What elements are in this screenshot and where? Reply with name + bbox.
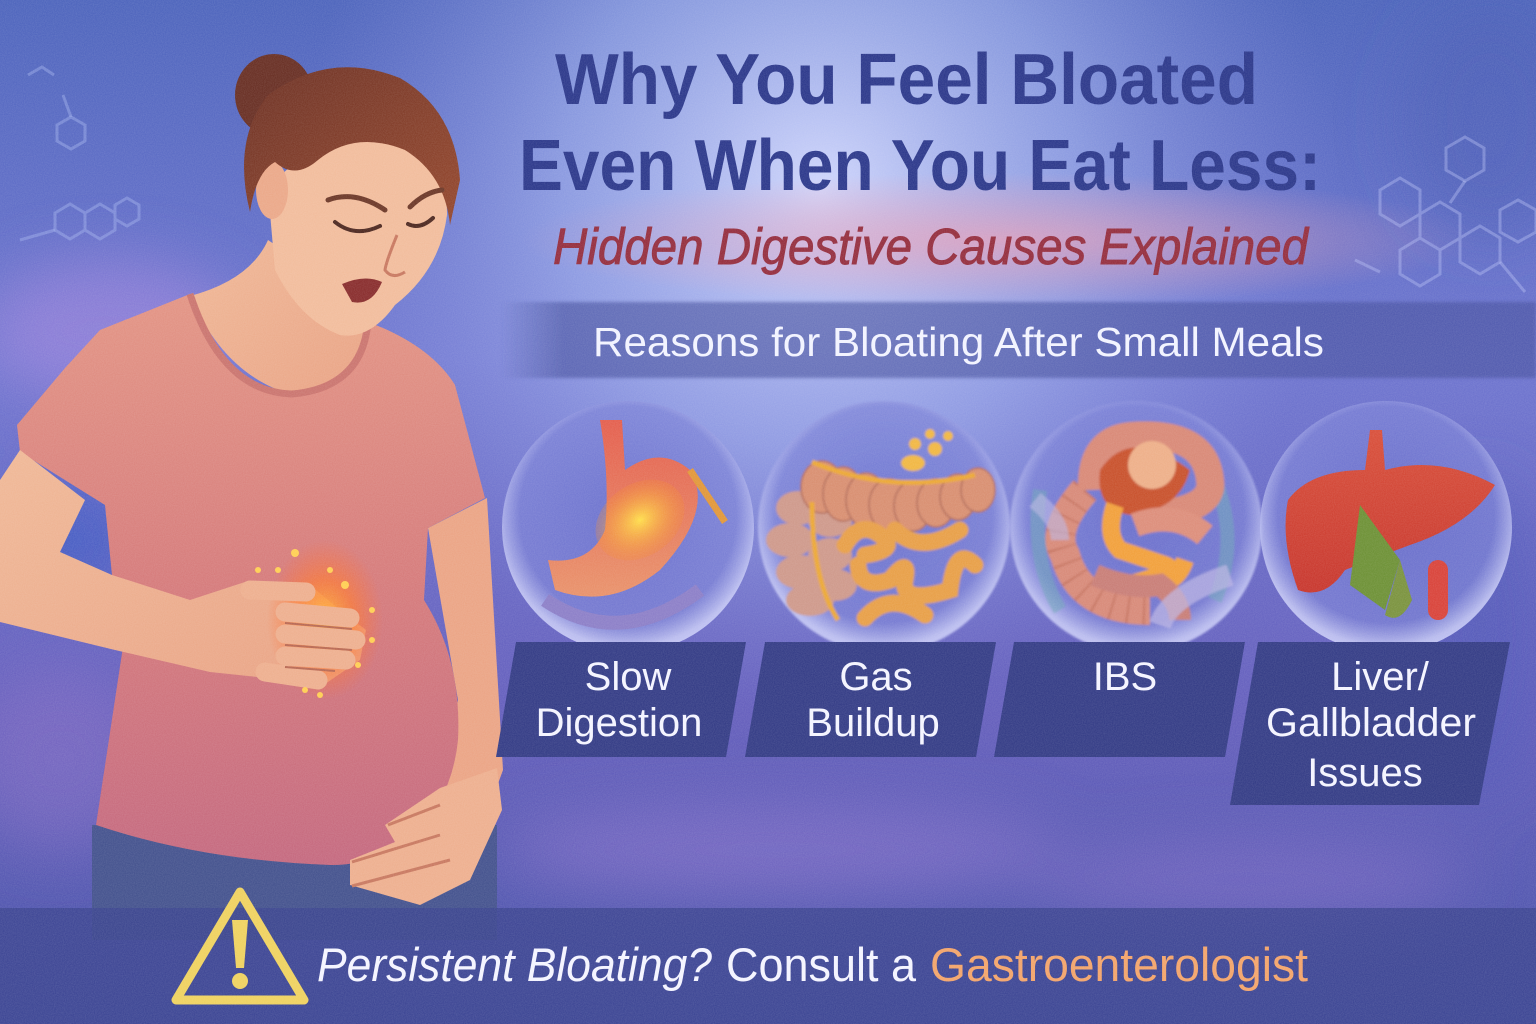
nose: [385, 235, 405, 276]
label: gas buildup: [745, 642, 996, 757]
ear: [256, 161, 288, 219]
t-shirt: [17, 294, 485, 865]
subtitle: Hidden Digestive Causes Explained: [553, 218, 1310, 275]
mouth: [342, 278, 382, 303]
label: liver/gallbladder issues: Issues: [1307, 751, 1423, 795]
lower hand fingers: [352, 805, 450, 886]
callout text: Consult a: [726, 938, 917, 991]
woman figure: [0, 54, 503, 940]
colon band: [812, 462, 975, 483]
callout text: Persistent Bloating?: [317, 938, 712, 991]
label: slow digestion: Digestion: [536, 701, 702, 745]
label: liver/gallbladder issues: [1230, 642, 1510, 805]
gas bubbles: [901, 429, 953, 471]
lower body jeans: [92, 825, 497, 940]
pain glow on stomach: [267, 540, 383, 700]
section banner: [500, 302, 1536, 378]
title: [519, 40, 1321, 206]
hair bun: [235, 54, 313, 136]
bottom banner: [0, 892, 1536, 1024]
label: IBS: IBS: [1093, 655, 1157, 699]
upper hand fingers: [250, 590, 356, 680]
small intestine: [845, 529, 975, 618]
title: Even When You Eat Less:: [519, 126, 1321, 206]
hair: [244, 67, 460, 225]
finger creases: [285, 623, 352, 671]
left arm: [0, 450, 366, 684]
molecule pattern right: [1355, 137, 1536, 292]
label: liver/gallbladder issues: Liver/: [1331, 655, 1430, 699]
bubble: liver: [1260, 401, 1512, 653]
stomach: [548, 420, 698, 597]
label: gas buildup: Gas: [839, 655, 913, 699]
lower hand: [350, 768, 502, 905]
transverse colon: [801, 461, 995, 531]
face: [268, 134, 447, 336]
section banner: Reasons for Bloating After Small Meals: [593, 319, 1324, 365]
bubble: IBS: [1010, 401, 1262, 653]
label: slow digestion: [496, 642, 746, 757]
callout text: Gastroenterologist: [930, 938, 1308, 991]
right arm: [428, 498, 503, 800]
neck: [190, 240, 372, 394]
eyes and brows: [328, 190, 442, 231]
shirt collar: [190, 294, 368, 394]
pain sparks: [255, 549, 375, 698]
bubble: gas buildup: [758, 401, 1010, 653]
bubble: slow digestion: [502, 401, 754, 653]
label: liver/gallbladder issues: Gallbladder: [1266, 701, 1476, 745]
ascending colon: [766, 491, 857, 616]
title: Why You Feel Bloated: [555, 40, 1258, 120]
label: slow digestion: Slow: [585, 655, 671, 699]
icon: warning triangle: [176, 892, 304, 1000]
label: gas buildup: Buildup: [806, 701, 940, 745]
molecule pattern left: [20, 67, 139, 240]
label: IBS: [994, 642, 1245, 757]
